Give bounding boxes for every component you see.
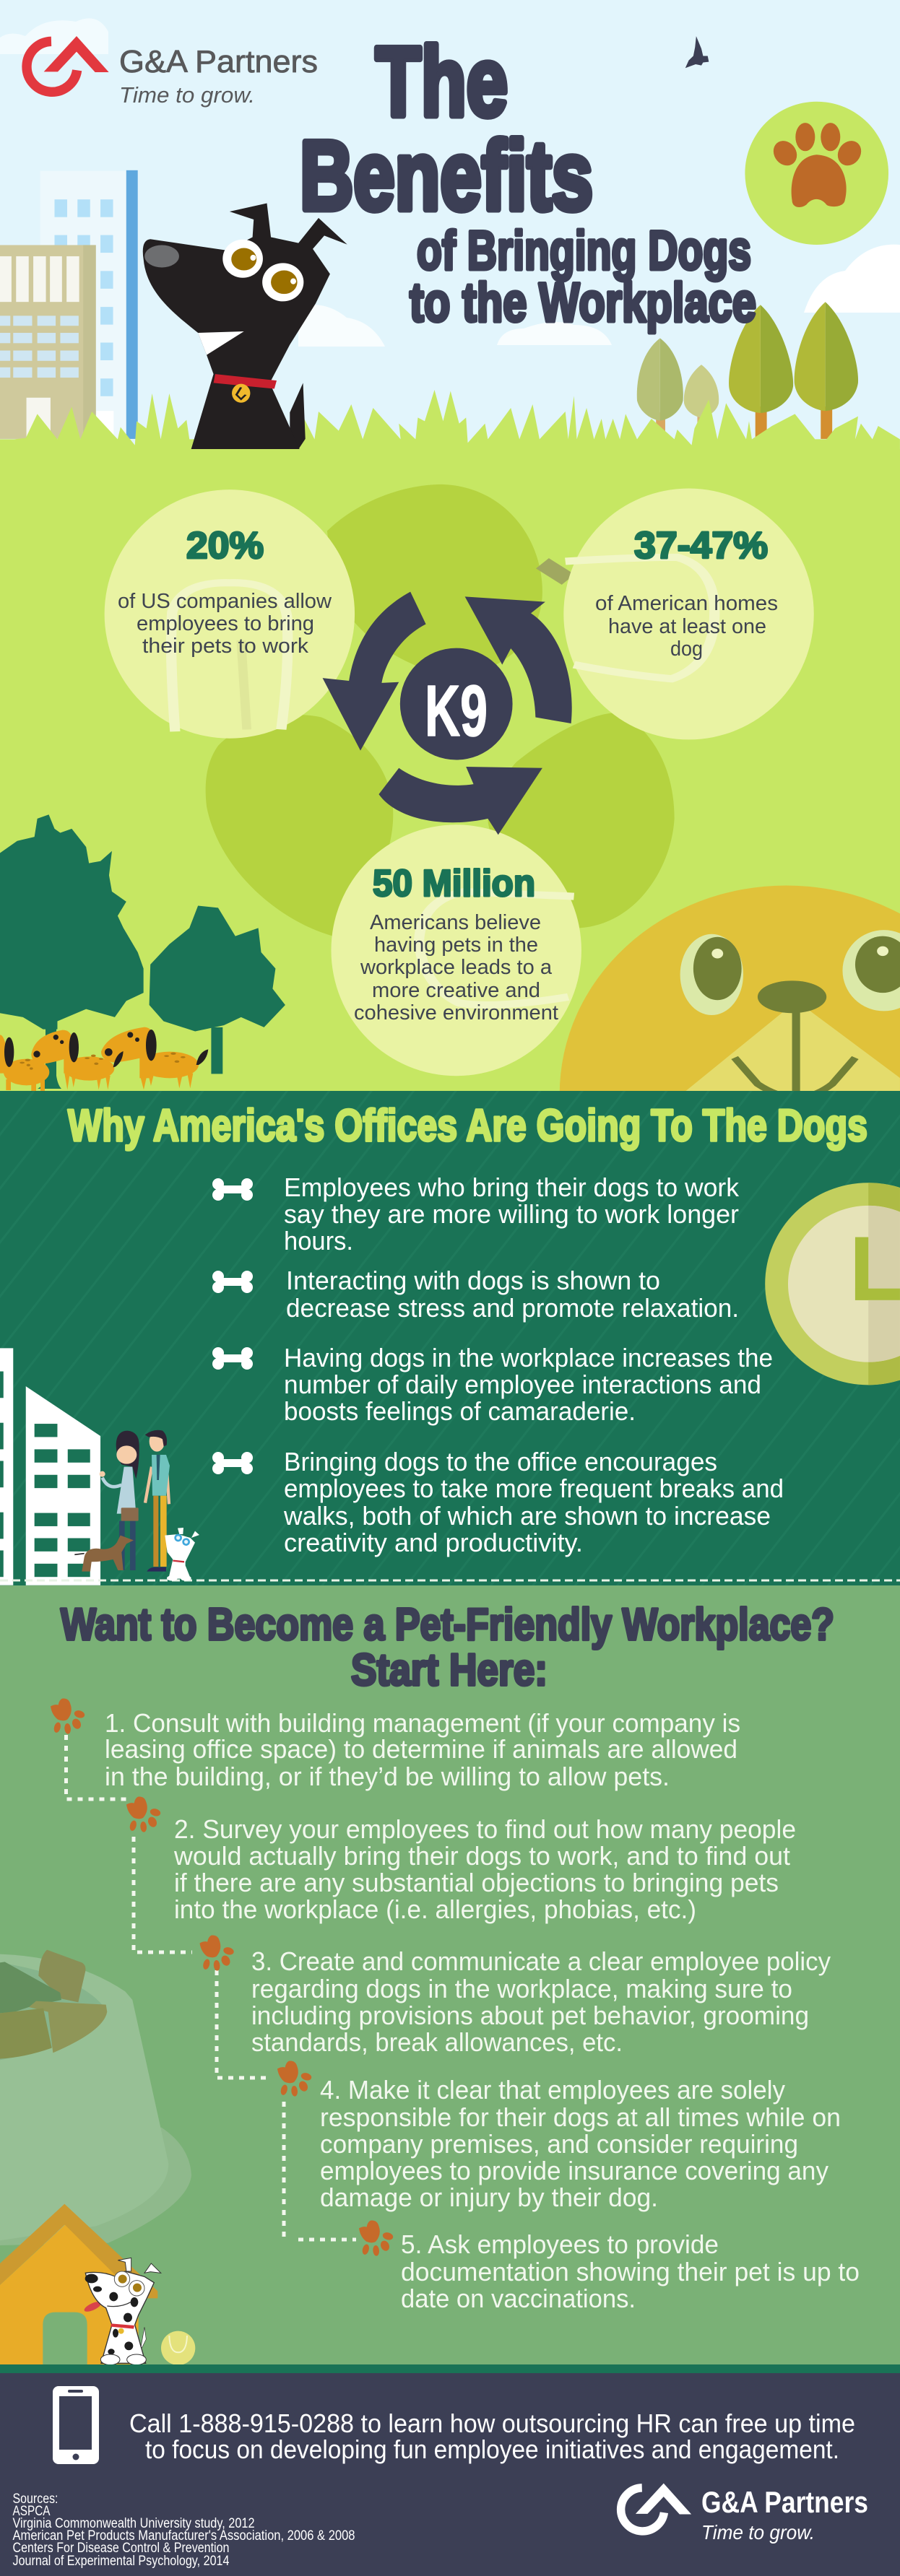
step 4: damage or injury by their dog. [320, 2183, 658, 2212]
stat: 37-47 percent: of American homes [595, 592, 778, 615]
stat: 20 percent: their pets to work [142, 635, 309, 658]
logo: G&A Partners: G&A Partners [119, 44, 318, 79]
step 2: would actually bring their dogs to work, and to find out [173, 1841, 790, 1871]
list item: longer hours: Employees who bring their dogs to work [284, 1172, 740, 1202]
heading [61, 1600, 834, 1695]
step 4: company premises, and consider requiring [320, 2129, 798, 2159]
step 1 [51, 1699, 740, 1791]
sources: ASPCA [13, 2504, 51, 2519]
icon: bird [685, 36, 709, 68]
step 2: if there are any substantial objections to bringing pets [174, 1868, 779, 1897]
sources [13, 2492, 355, 2569]
icon: smartphone [53, 2386, 99, 2464]
heading: Start Here: [351, 1645, 548, 1695]
step 4: employees to provide insurance covering any [320, 2156, 828, 2185]
call to action [129, 2409, 855, 2464]
step 3: including provisions about pet behavior, grooming [251, 2001, 809, 2030]
step 4: 4. Make it clear that employees are solely [320, 2075, 785, 2105]
icon: paw badge [745, 102, 888, 245]
trees [637, 302, 858, 439]
illustration: couple with dogs [74, 1430, 199, 1581]
stat: 37-47 percent: 37-47% [634, 525, 768, 567]
step 5 [359, 2221, 860, 2313]
step 4: responsible for their dogs at all times while on [320, 2102, 841, 2132]
illustration: tennis ball leaves and circles [105, 484, 814, 1076]
list item: creativity: walks, both of which are shown to increase [283, 1501, 771, 1531]
call to action: to focus on developing fun employee initiatives and engagement. [145, 2434, 839, 2464]
step 2: into the workplace (i.e. allergies, phobias, etc.) [174, 1894, 696, 1924]
title: to the Workplace [410, 272, 756, 334]
illustration: dog house with dalmatian and ball [0, 2204, 195, 2365]
list item: creativity: Bringing dogs to the office encourages [284, 1447, 717, 1476]
panel: sky hero [0, 0, 900, 450]
illustration: food bowl [0, 1950, 191, 2245]
decorative dotted connectors [66, 1735, 356, 2241]
sources: Journal of Experimental Psychology, 2014 [13, 2554, 230, 2569]
step 5: 5. Ask employees to provide [401, 2229, 719, 2259]
illustration: green trees [0, 814, 285, 1089]
step 4 [277, 2061, 841, 2212]
step 2 [126, 1797, 796, 1924]
sources: American Pet Products Manufacturer's Association, 2006 & 2008 [13, 2528, 355, 2544]
clouds [0, 18, 900, 347]
stat: 50 million: workplace leads to a [360, 956, 553, 979]
stat: 20 percent: employees to bring [137, 612, 314, 635]
stat: 20 percent: 20% [186, 525, 264, 567]
title: of Bringing Dogs [417, 220, 751, 282]
title [300, 27, 756, 334]
panel: why offices are going to the dogs [0, 1091, 900, 1585]
panel: K9 statistics [0, 449, 900, 1302]
list item: less stress: Interacting with dogs is shown to [286, 1266, 660, 1295]
illustration: yellow dog face [560, 885, 900, 1302]
stat: 20 percent: of US companies allow [118, 590, 332, 613]
stat: 50 million: more creative and [372, 979, 540, 1002]
title: The [376, 27, 508, 136]
list item: less stress: decrease stress and promote relaxation. [286, 1293, 739, 1323]
illustration: clock [765, 1183, 900, 1385]
step 3 [199, 1936, 831, 2057]
list item: longer hours [212, 1172, 740, 1256]
logo: footer G&A Partners [621, 2484, 868, 2544]
list item: camaraderie [212, 1343, 773, 1426]
step 1: 1. Consult with building management (if your company is [105, 1708, 740, 1738]
list item: longer hours: say they are more willing to work longer [284, 1199, 739, 1229]
blue office building [40, 170, 138, 439]
panel: pet-friendly workplace steps [0, 1585, 900, 2365]
stat: 37-47 percent: dog [670, 638, 703, 661]
step 1: in the building, or if they’d be willing to allow pets. [105, 1762, 670, 1791]
logo: footer G&A Partners: G&A Partners [701, 2485, 868, 2519]
sources: Centers For Disease Control & Prevention [13, 2541, 230, 2556]
illustration: black dog [143, 204, 347, 449]
logo: G&A Partners [27, 36, 318, 108]
logo: G&A Partners: Time to grow. [119, 82, 255, 108]
arrows: cycle [323, 592, 572, 835]
stat: 50 million: cohesive environment [354, 1001, 558, 1024]
list item: creativity [212, 1447, 784, 1557]
call to action: Call 1-888-915-0288 to learn how outsourcing HR can free up time [129, 2409, 855, 2438]
stat: 50 million: Americans believe [370, 911, 541, 934]
decorative ground dashes [0, 1580, 900, 1581]
list item: creativity: employees to take more frequent breaks and [284, 1474, 784, 1503]
K9 badge text: K9 [425, 671, 488, 752]
step 2: 2. Survey your employees to find out how many people [174, 1814, 796, 1844]
logo: footer G&A Partners: Time to grow. [701, 2521, 815, 2544]
list item: camaraderie: number of daily employee interactions and [284, 1370, 761, 1399]
stat: 50 million: having pets in the [374, 934, 538, 957]
stat: 20 percent [118, 525, 332, 658]
illustration: white office buildings [0, 1348, 100, 1585]
step 1: leasing office space) to determine if animals are allowed [105, 1734, 737, 1764]
illustration: orange dogs [0, 1027, 208, 1092]
step 3: regarding dogs in the workplace, making sure to [251, 1974, 792, 2003]
sources: Virginia Commonwealth University study, 2012 [13, 2516, 254, 2531]
list item: longer hours: hours. [284, 1226, 353, 1256]
title: Benefits [300, 121, 593, 230]
step 3: standards, break allowances, etc. [251, 2027, 623, 2057]
step 3: 3. Create and communicate a clear employee policy [251, 1946, 831, 1976]
stat: 50 million [354, 863, 558, 1024]
sources: Sources: [13, 2492, 58, 2507]
panel: footer [0, 2364, 900, 2576]
list item: camaraderie: boosts feelings of camaraderie. [284, 1396, 636, 1426]
stat: 37-47 percent: have at least one [608, 615, 766, 638]
list item: less stress [212, 1266, 739, 1323]
tan office building [0, 245, 96, 439]
grass [0, 390, 900, 450]
step 5: date on vaccinations. [401, 2284, 636, 2313]
list item: creativity: creativity and productivity. [284, 1528, 583, 1557]
stat: 50 million: 50 Million [373, 863, 535, 905]
stat: 37-47 percent [595, 525, 778, 661]
list item: camaraderie: Having dogs in the workplace increases the [284, 1343, 773, 1372]
step 5: documentation showing their pet is up to [401, 2257, 860, 2286]
